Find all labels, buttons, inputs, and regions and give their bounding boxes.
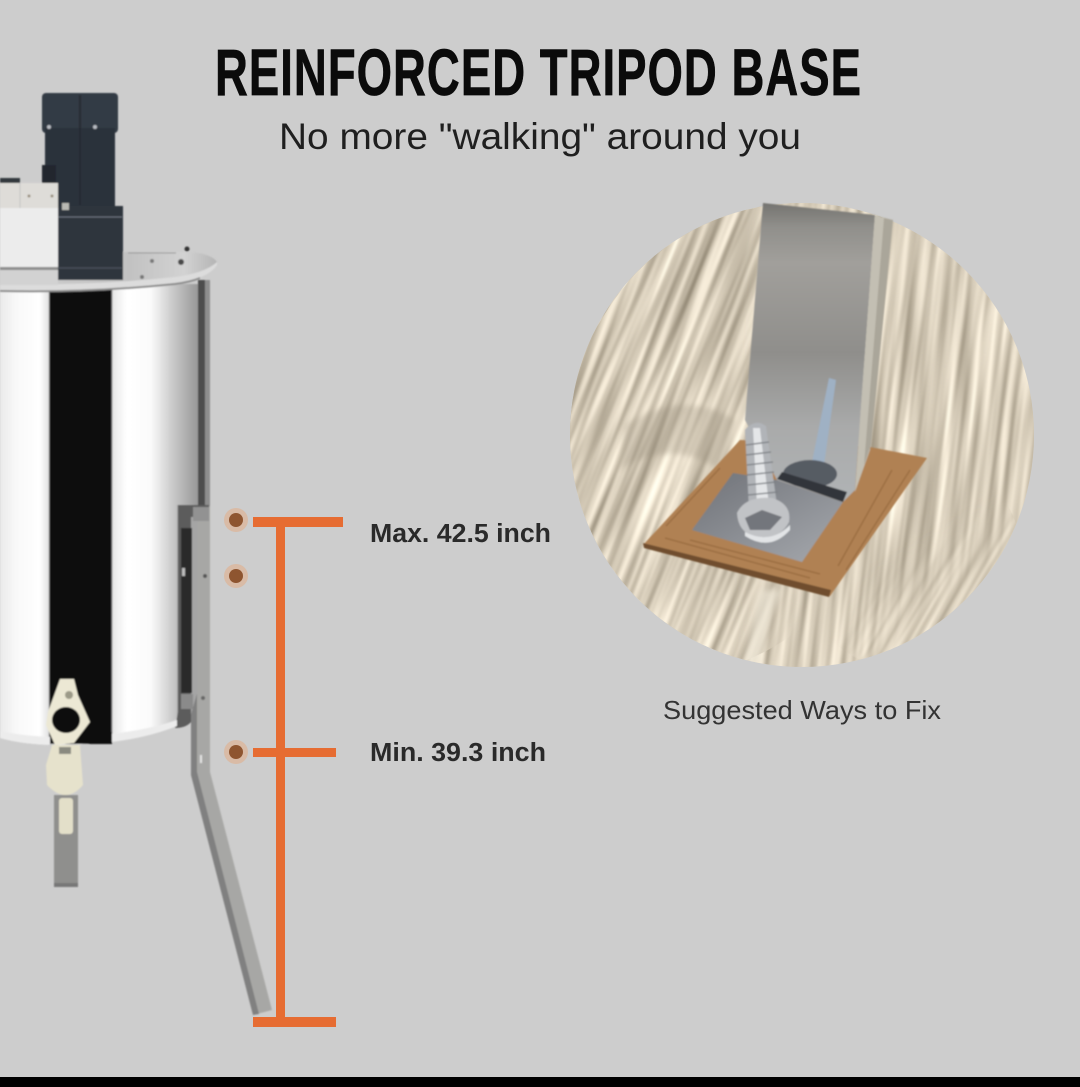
icon: tripod leg — [191, 505, 272, 1015]
dark side strip — [198, 280, 210, 506]
bottom bar — [0, 1077, 1080, 1087]
motor — [42, 93, 123, 280]
leg bracket — [175, 505, 209, 763]
detail circle: leg fixed to wood — [570, 202, 1034, 667]
gear housing — [0, 178, 58, 285]
lid — [0, 246, 217, 292]
subtitle: No more "walking" around you — [279, 115, 801, 157]
height dimension lines — [253, 517, 343, 1027]
steel leg — [745, 203, 893, 502]
label: minimum height: Min. 39.3 inch — [370, 739, 546, 767]
product: honey extractor — [0, 93, 272, 1015]
wood floor — [570, 203, 1034, 667]
wood plank — [643, 440, 927, 597]
cylinder body — [0, 284, 198, 745]
lower rim highlight — [0, 720, 177, 745]
dimension marker: top hole — [224, 508, 248, 532]
dimension marker: lower hole — [224, 740, 248, 764]
label: maximum height: Max. 42.5 inch — [370, 520, 551, 548]
bolt — [737, 423, 790, 543]
caption: suggested ways to fix: Suggested Ways to Fix — [663, 695, 941, 725]
dimension marker: middle hole — [224, 564, 248, 588]
metal foot plate — [692, 473, 843, 562]
icon: honey gate — [46, 679, 90, 887]
